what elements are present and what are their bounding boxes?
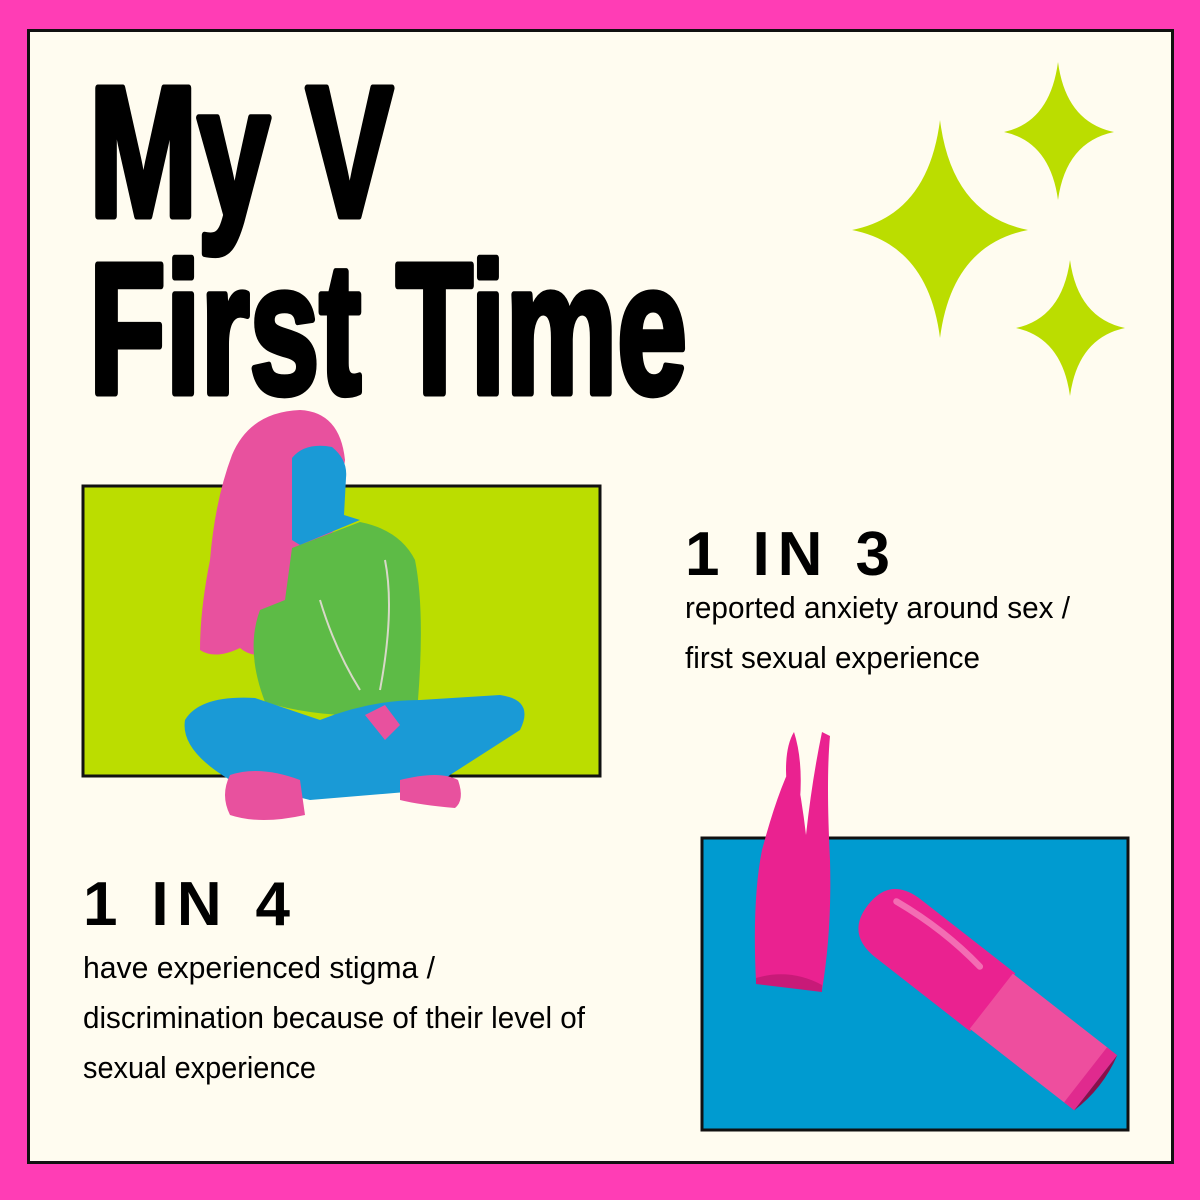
stat: 1 in 3: first sexual experience (685, 640, 980, 675)
title: My V (89, 49, 393, 256)
icon: sitting woman (185, 410, 524, 820)
stat: 1 in 3 (685, 520, 1070, 675)
icon: pink toy body (845, 876, 1122, 1115)
icon: pink toy cap (755, 732, 830, 992)
stat: 1 in 4: sexual experience (83, 1050, 316, 1085)
stat: 1 in 4 (83, 870, 585, 1085)
stat: 1 in 4: discrimination because of their level of (83, 1000, 585, 1035)
stat: 1 in 3: reported anxiety around sex / (685, 590, 1070, 625)
title (89, 49, 687, 433)
icon: sparkles (852, 62, 1125, 396)
panel: blue box (702, 838, 1128, 1130)
title: First Time (89, 226, 687, 433)
stat: 1 in 4: have experienced stigma / (83, 950, 435, 985)
stat: 1 in 3: 1 IN 3 (685, 520, 890, 589)
stat: 1 in 4: 1 IN 4 (83, 870, 291, 939)
panel: green box (83, 486, 600, 776)
